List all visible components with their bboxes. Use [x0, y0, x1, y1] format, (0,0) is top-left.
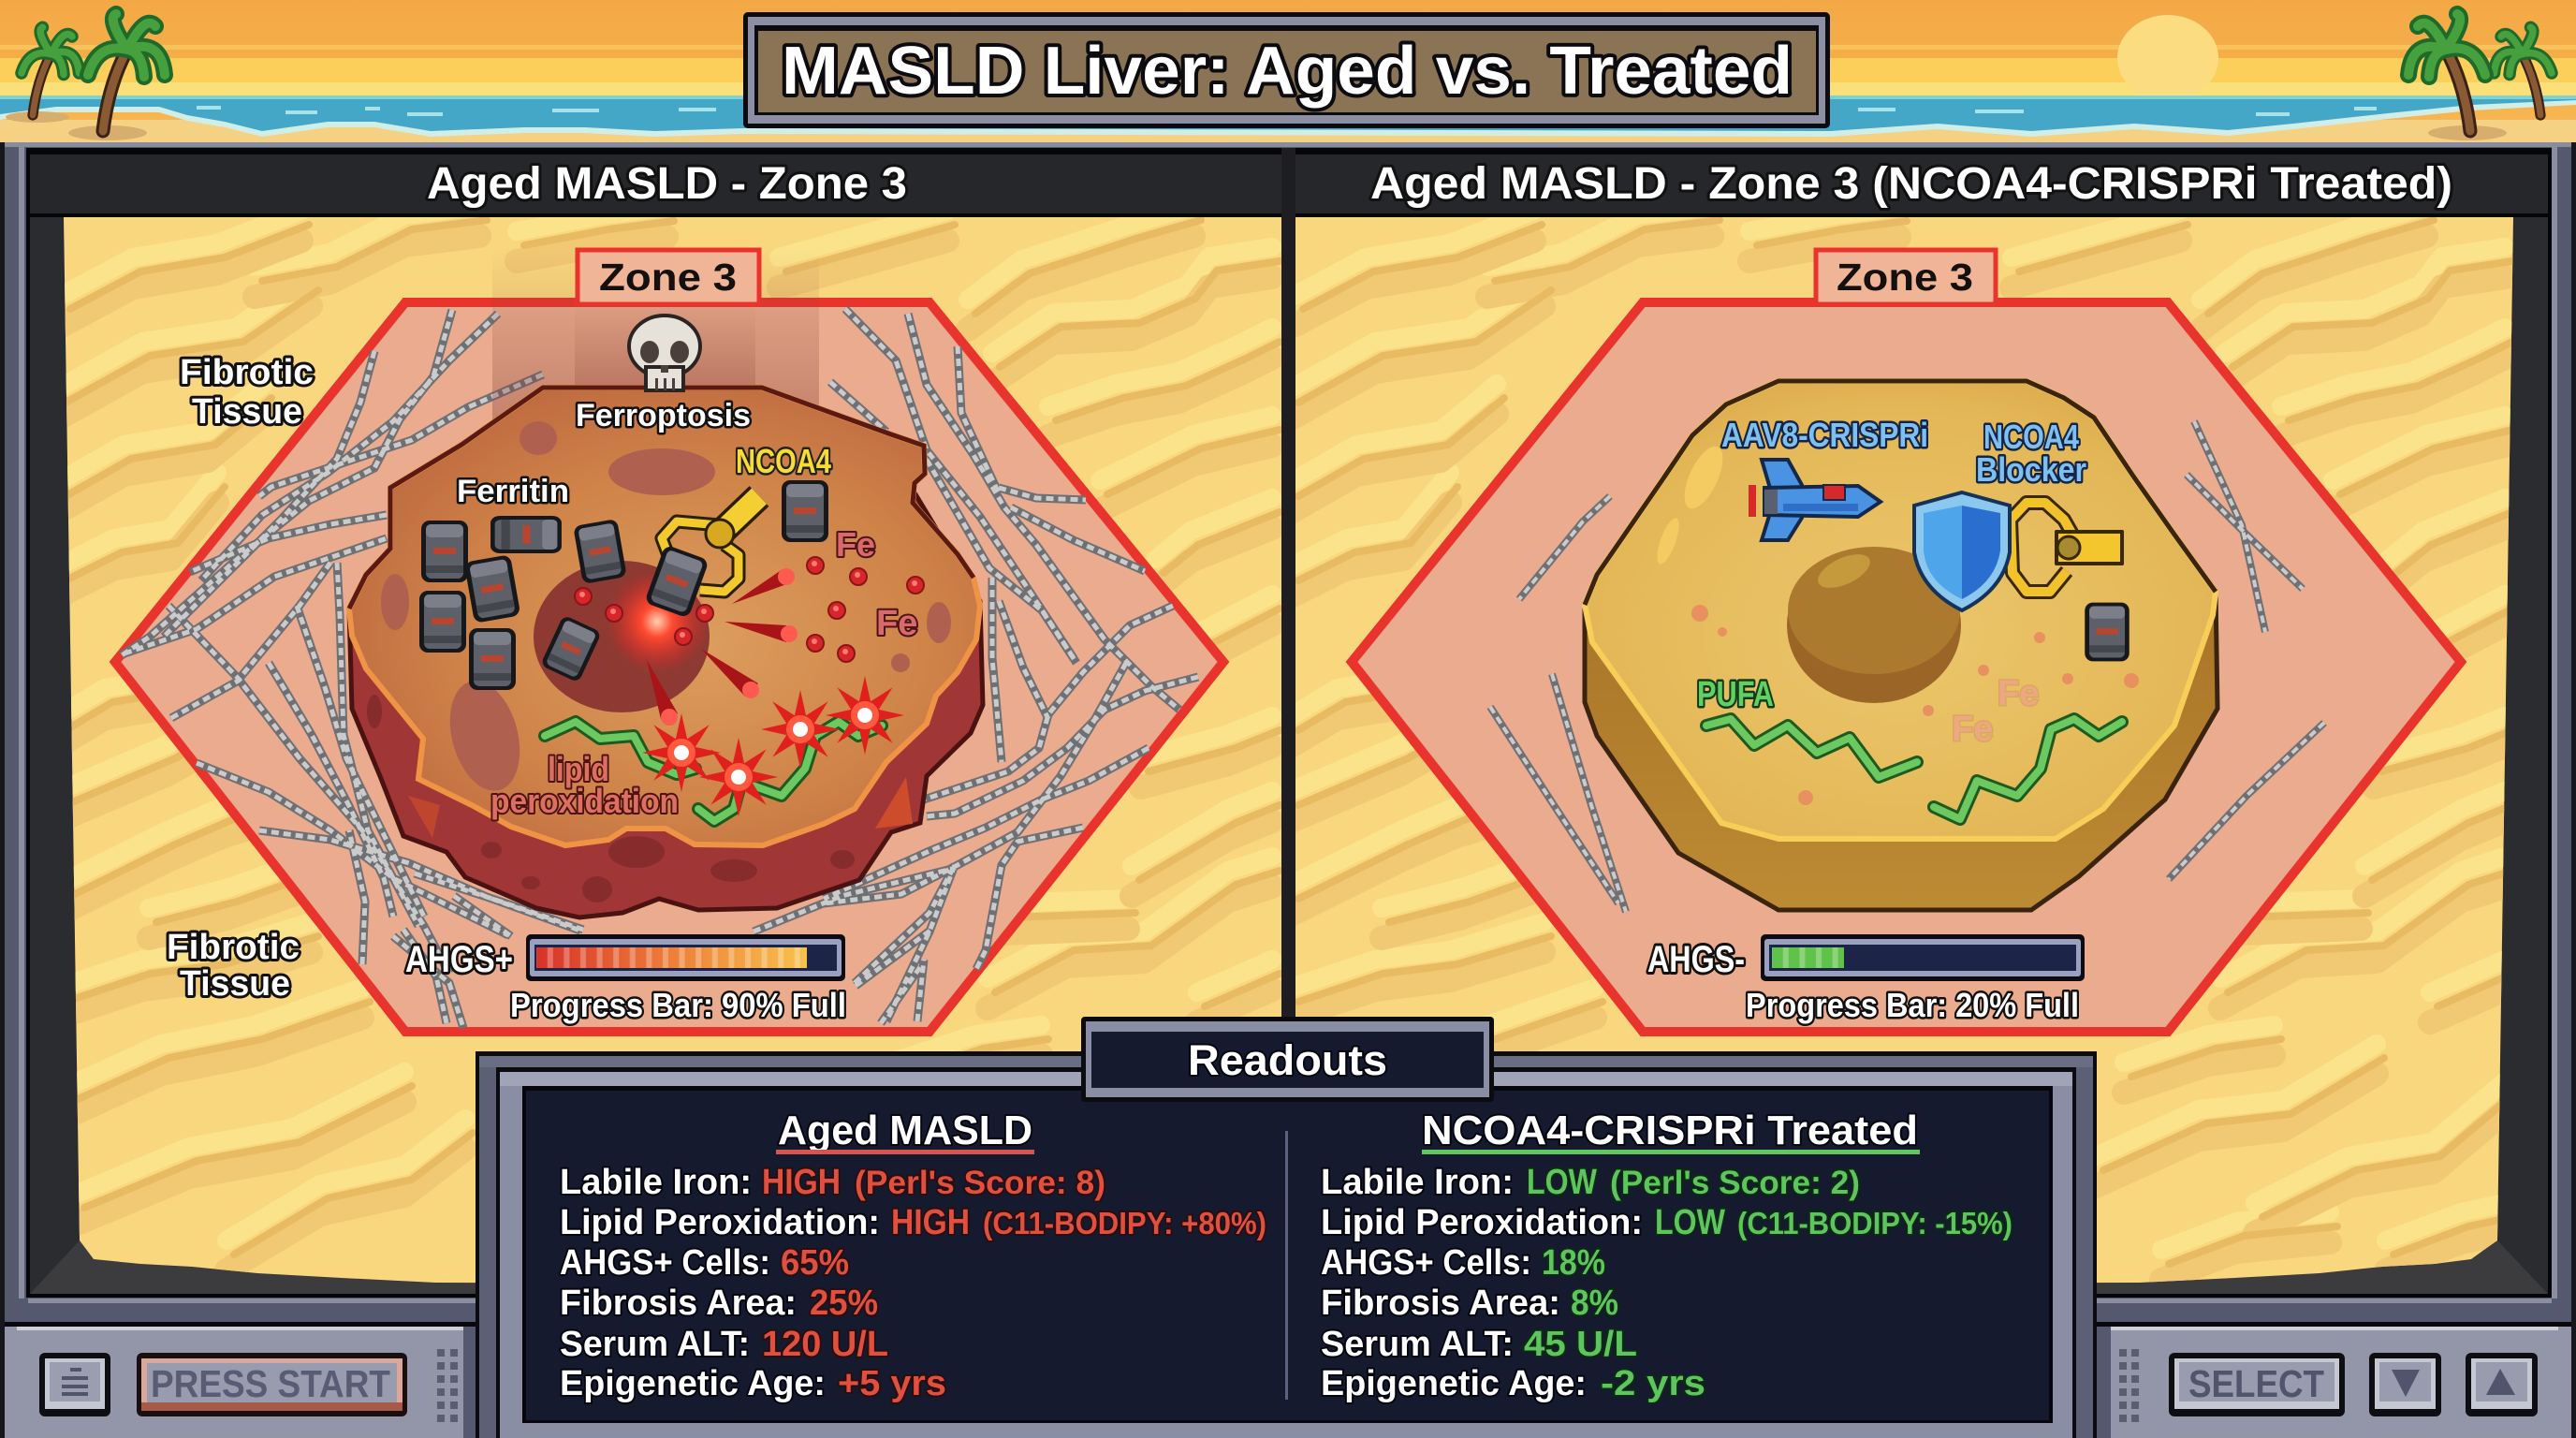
row: labile iron treated: (Perl's Score: 2)	[1610, 1165, 1860, 1201]
row: labile iron	[560, 1163, 1105, 1202]
row: serum ALT treated	[1321, 1325, 1637, 1364]
AHGS+ progress bar	[405, 934, 846, 1024]
row: epigenetic age	[560, 1364, 946, 1403]
label: Fe lower: Fe	[876, 604, 917, 643]
panel: readouts	[476, 1017, 2097, 1438]
row: serum ALT treated: Serum ALT:	[1321, 1325, 1514, 1364]
panel: treated hexagonal zone	[1352, 302, 2461, 1032]
left panel header	[30, 154, 1281, 217]
icon: blue shield	[1914, 492, 2010, 610]
background: sunset sky	[0, 0, 2576, 150]
label: Fe lower faded: Fe	[1952, 710, 1993, 749]
row: lipid peroxidation treated	[1321, 1203, 2012, 1242]
sparse fibres	[1490, 421, 2324, 912]
left panel sand background	[56, 206, 1292, 1294]
icon: palm trees right	[2408, 14, 2552, 140]
icon: setting sun	[2117, 15, 2218, 116]
label: Fe upper faded: Fe	[1998, 674, 2039, 713]
row: epigenetic age treated	[1321, 1364, 1705, 1403]
fibrotic strands	[122, 309, 1198, 1028]
label: Zone 3 left tab: Zone 3	[599, 256, 737, 299]
label: Zone 3 right tab: Zone 3	[1837, 256, 1973, 299]
label: Ferritin: Ferritin	[457, 474, 569, 509]
button: select: SELECT	[2188, 1362, 2324, 1405]
left panel header: Aged MASLD - Zone 3	[427, 159, 907, 209]
AHGS+ progress bar: Progress Bar: 90% Full	[510, 986, 846, 1024]
label: lipid peroxidation: lipid	[548, 750, 609, 788]
NCOA4 claw	[662, 496, 759, 592]
row: fibrosis area treated: Fibrosis Area:	[1321, 1284, 1560, 1323]
column: NCOA4-CRISPRi treated	[1321, 1108, 2012, 1403]
label: Fe upper: Fe	[836, 525, 875, 564]
labile iron dots	[575, 557, 924, 662]
row: serum ALT	[560, 1325, 888, 1364]
left control panel	[5, 1327, 463, 1438]
right panel header: Aged MASLD - Zone 3 (NCOA4-CRISPRi Treated)	[1370, 159, 2452, 209]
AHGS- progress bar	[1647, 934, 2085, 1024]
AHGS+ progress bar: AHGS+	[405, 939, 513, 980]
row: epigenetic age: +5 yrs	[838, 1364, 946, 1403]
row: labile iron: HIGH	[762, 1163, 841, 1202]
panel: aged hexagonal zone	[115, 248, 1223, 1032]
button: up arrow	[2466, 1353, 2538, 1416]
label: NCOA4: NCOA4	[736, 442, 831, 480]
nucleus	[1787, 548, 1961, 703]
row: lipid peroxidation treated: LOW	[1655, 1203, 1725, 1242]
row: labile iron treated	[1321, 1163, 1860, 1202]
label: lipid peroxidation: peroxidation	[490, 782, 679, 820]
row: fibrosis area: 25%	[810, 1284, 878, 1323]
row: AHGS+ cells treated: 18%	[1542, 1243, 1605, 1283]
row: labile iron treated: LOW	[1527, 1163, 1597, 1202]
row: labile iron: (Perl's Score: 8)	[855, 1165, 1105, 1201]
lipid peroxidation bursts	[642, 676, 904, 816]
label: NCOA4 Blocker: NCOA4	[1983, 418, 2079, 456]
row: AHGS+ cells treated: AHGS+ Cells:	[1321, 1243, 1531, 1283]
row: serum ALT: 120 U/L	[762, 1325, 888, 1364]
AHGS- progress bar: Progress Bar: 20% Full	[1746, 986, 2079, 1024]
icon: NCOA4 blocker claw	[2011, 503, 2122, 592]
button: press start	[137, 1353, 407, 1416]
label: Zone 3 left tab	[578, 250, 759, 304]
button: down arrow	[2369, 1353, 2441, 1416]
row: lipid peroxidation: HIGH	[891, 1203, 970, 1242]
ferroptosis glow column	[492, 248, 819, 449]
ferritin barrels	[419, 480, 828, 690]
button: press start: PRESS START	[151, 1362, 390, 1405]
label: Zone 3 right tab	[1816, 250, 1996, 304]
speaker grille right	[2119, 1349, 2139, 1422]
row: fibrosis area: Fibrosis Area:	[560, 1284, 797, 1323]
label: Fibrotic Tissue lower	[167, 928, 300, 1004]
row: AHGS+ cells: AHGS+ Cells:	[560, 1243, 770, 1283]
PUFA chains	[545, 722, 882, 821]
row: epigenetic age treated: Epigenetic Age:	[1321, 1364, 1587, 1403]
label: Fibrotic Tissue upper: Fibrotic	[180, 353, 314, 392]
title plaque: MASLD Liver: Aged vs. Treated	[782, 34, 1793, 109]
label: NCOA4 Blocker: Blocker	[1976, 450, 2086, 489]
row: AHGS+ cells: 65%	[781, 1243, 849, 1283]
label: Ferroptosis: Ferroptosis	[576, 398, 751, 433]
label: Fibrotic Tissue lower: Tissue	[180, 964, 290, 1004]
row: lipid peroxidation	[560, 1203, 1266, 1242]
iron comet streaks	[647, 568, 798, 726]
icon: palm trees left	[6, 14, 165, 140]
label: Fibrotic Tissue lower: Fibrotic	[167, 928, 300, 967]
label: Fibrotic Tissue upper	[180, 353, 314, 432]
row: lipid peroxidation: (C11-BODIPY: +80%)	[983, 1206, 1266, 1240]
label: PUFA: PUFA	[1697, 675, 1774, 714]
label: NCOA4 Blocker	[1976, 418, 2086, 489]
column: aged MASLD: Aged MASLD	[778, 1108, 1032, 1153]
faded iron dots	[1691, 605, 2139, 805]
label: Fibrotic Tissue upper: Tissue	[192, 392, 302, 432]
button: menu	[39, 1353, 110, 1416]
row: epigenetic age treated: -2 yrs	[1601, 1364, 1705, 1403]
row: lipid peroxidation: Lipid Peroxidation:	[560, 1203, 880, 1242]
right panel header	[1295, 154, 2548, 217]
icon: skull	[629, 315, 700, 390]
PUFA chains intact	[1706, 719, 2122, 819]
cell: healthy hepatocyte	[1585, 381, 2217, 910]
nucleus	[534, 561, 710, 712]
row: serum ALT treated: 45 U/L	[1524, 1325, 1637, 1364]
readouts tab: Readouts	[1188, 1036, 1387, 1084]
row: lipid peroxidation treated: Lipid Peroxidation:	[1321, 1203, 1643, 1242]
label: lipid peroxidation	[490, 750, 679, 820]
title plaque	[743, 12, 1830, 128]
speaker grille left	[437, 1349, 458, 1422]
row: epigenetic age: Epigenetic Age:	[560, 1364, 826, 1403]
label: AAV8-CRISPRi: AAV8-CRISPRi	[1721, 416, 1928, 454]
right panel sand background	[1291, 206, 2527, 1294]
AHGS- progress bar: AHGS-	[1647, 939, 1745, 980]
readouts tab	[1081, 1017, 1494, 1102]
right control panel	[2111, 1327, 2571, 1438]
row: serum ALT: Serum ALT:	[560, 1325, 750, 1364]
row: lipid peroxidation treated: (C11-BODIPY: -15%)	[1737, 1206, 2012, 1240]
button: select	[2169, 1353, 2345, 1416]
row: labile iron treated: Labile Iron:	[1321, 1163, 1514, 1202]
column: NCOA4-CRISPRi treated: NCOA4-CRISPRi Treated	[1422, 1108, 1918, 1153]
beach and water strip	[0, 95, 2576, 150]
row: fibrosis area treated: 8%	[1571, 1284, 1618, 1323]
centre divider	[1281, 148, 1295, 1023]
column: aged MASLD	[560, 1108, 1266, 1403]
icon: rocket	[1749, 460, 1881, 540]
row: labile iron: Labile Iron:	[560, 1163, 752, 1202]
